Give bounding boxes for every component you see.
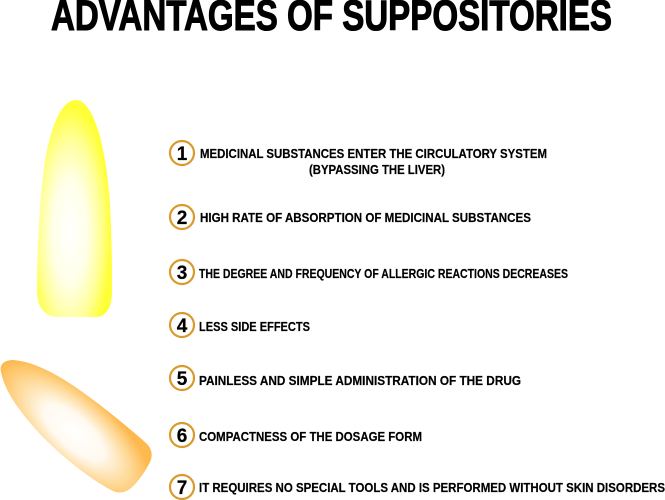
list item 2: 2 xyxy=(177,208,187,229)
list item 7: 7 xyxy=(177,478,187,499)
list item 6: COMPACTNESS OF THE DOSAGE FORM xyxy=(199,429,422,444)
list item 1: MEDICINAL SUBSTANCES ENTER THE CIRCULATORY SYSTEM xyxy=(200,146,547,161)
icon: orange suppository xyxy=(1,360,152,492)
list item 7 xyxy=(170,475,665,499)
list item 6 xyxy=(170,423,422,447)
list item 5 xyxy=(170,366,521,390)
list item 4: LESS SIDE EFFECTS xyxy=(199,319,310,334)
list item 1: (BYPASSING THE LIVER) xyxy=(309,162,445,177)
list item 2: HIGH RATE OF ABSORPTION OF MEDICINAL SUBSTANCES xyxy=(200,210,531,225)
list item 3 xyxy=(170,260,568,284)
list item 1 xyxy=(170,141,547,177)
list item 3: 3 xyxy=(177,263,187,284)
list item 5: 5 xyxy=(177,369,188,390)
list item 3: THE DEGREE AND FREQUENCY OF ALLERGIC REACTIONS DECREASES xyxy=(199,266,568,281)
list item 2 xyxy=(170,205,531,229)
list item 1: 1 xyxy=(177,144,188,165)
list item 4 xyxy=(170,313,310,337)
icon: yellow suppository xyxy=(37,100,112,317)
list item 6: 6 xyxy=(177,426,187,447)
list item 5: PAINLESS AND SIMPLE ADMINISTRATION OF THE DRUG xyxy=(199,373,521,388)
list item 4: 4 xyxy=(177,316,188,337)
